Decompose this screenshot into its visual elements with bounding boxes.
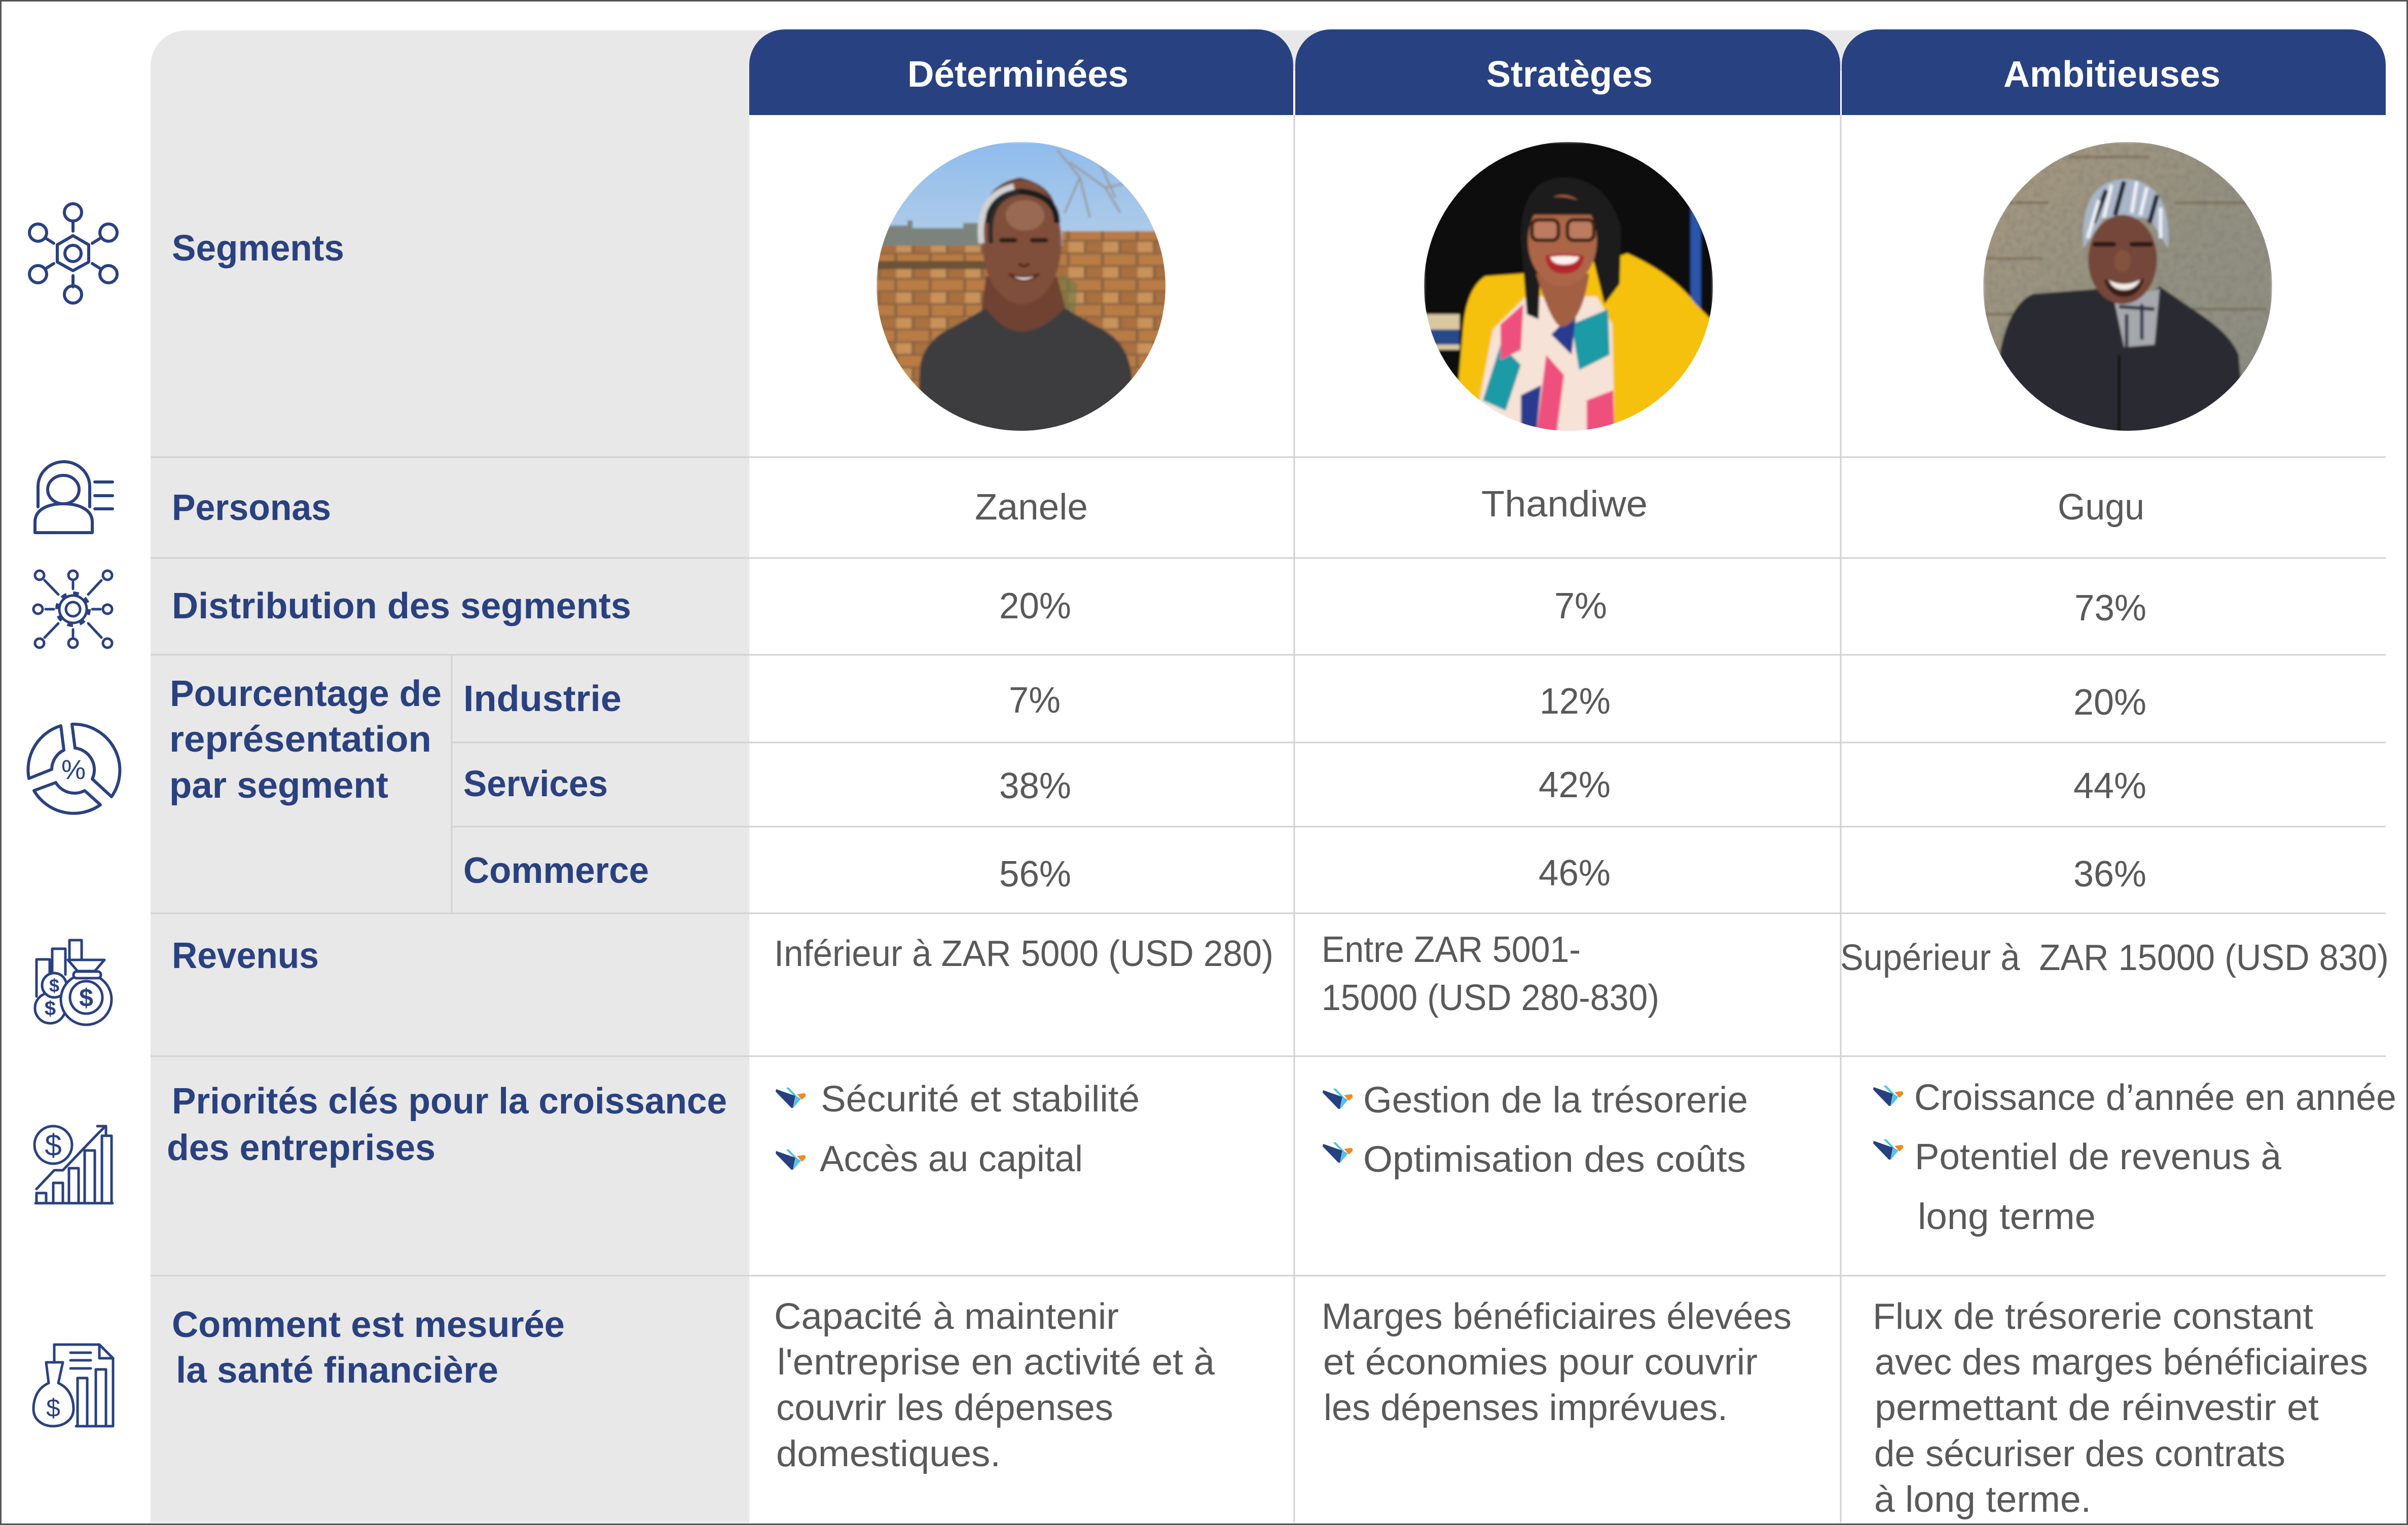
distribution value: 7%: 7% — [1554, 586, 1607, 626]
icon: persona — [35, 462, 113, 533]
persona name: Thandiwe: Thandiwe — [1481, 484, 1648, 525]
photo: Déterminées portrait — [877, 142, 1169, 436]
financial health: Stratèges — [1322, 1296, 1792, 1428]
industrie value: 12%: 12% — [1540, 681, 1611, 722]
financial health: Ambitieuses — [1873, 1296, 2368, 1520]
header: Déterminées: Déterminées — [907, 54, 1128, 95]
icon: revenue coins and bag: $ — [49, 975, 59, 996]
label: Priorités clés pour la croissance des entreprises — [167, 1081, 727, 1168]
label: Industrie: Industrie — [463, 679, 622, 719]
header: Ambitieuses: Ambitieuses — [2003, 54, 2220, 95]
priorities list: Déterminées: Sécurité et stabilité — [821, 1079, 1140, 1120]
industrie value: 20%: 20% — [2073, 682, 2146, 723]
icon: financial document and money bag: $ — [46, 1394, 60, 1422]
icon: revenue coins and bag: $ — [45, 997, 56, 1020]
header: Stratèges — [1295, 29, 1840, 115]
revenue: Ambitieuses: Supérieur à ZAR 15000 (USD 830) — [1840, 938, 2389, 978]
financial health: Ambitieuses: à long terme. — [1874, 1479, 2091, 1520]
services value: 42%: 42% — [1539, 765, 1611, 805]
financial health: Déterminées: domestiques. — [776, 1434, 1001, 1474]
header: Ambitieuses — [1842, 29, 2386, 115]
priorities list: Déterminées: Accès au capital — [820, 1139, 1083, 1179]
label: Revenus: Revenus — [172, 936, 319, 976]
panel: grey label column — [151, 30, 1886, 1523]
commerce value: 36%: 36% — [2073, 854, 2146, 895]
revenue: Déterminées: Inférieur à ZAR 5000 (USD 280) — [774, 934, 1273, 974]
revenue: Stratèges: 15000 (USD 280-830) — [1322, 978, 1659, 1018]
services value: 38%: 38% — [999, 766, 1071, 806]
label: Pourcentage de représentation par segment: Pourcentage de — [170, 674, 442, 714]
label: Commerce: Commerce — [463, 850, 649, 891]
persona name: Gugu: Gugu — [2058, 487, 2144, 528]
commerce value: 46%: 46% — [1539, 853, 1611, 894]
icon: growth chart: $ — [45, 1128, 62, 1162]
icon: percentage pie — [28, 724, 120, 813]
revenue: Stratèges — [1322, 929, 1659, 1018]
financial health: Déterminées: l'entreprise en activité et à — [777, 1342, 1215, 1383]
financial health: Déterminées — [774, 1296, 1215, 1474]
financial health: Déterminées: Capacité à maintenir — [774, 1296, 1119, 1337]
financial health: Ambitieuses: de sécuriser des contrats — [1874, 1434, 2285, 1474]
label: Services: Services — [463, 764, 608, 804]
label: Segments: Segments — [172, 228, 344, 269]
revenue: Stratèges: Entre ZAR 5001- — [1322, 929, 1581, 970]
label: Comment est mesurée la santé financière: la santé financière — [176, 1350, 498, 1391]
header: Déterminées — [749, 29, 1293, 115]
priorities list: Stratèges — [1323, 1080, 1748, 1180]
financial health: Ambitieuses: permettant de réinvestir et — [1875, 1388, 2319, 1428]
priorities list: Ambitieuses — [1873, 1077, 2396, 1237]
icon: financial document and money bag — [33, 1345, 113, 1426]
label: Comment est mesurée la santé financière — [172, 1305, 565, 1391]
label: Priorités clés pour la croissance des entreprises: Priorités clés pour la croissance — [172, 1081, 727, 1122]
financial health: Ambitieuses: avec des marges bénéficiaires — [1875, 1342, 2368, 1383]
icon: growth chart — [34, 1126, 113, 1203]
icon: segments hub — [29, 204, 117, 303]
photo: Ambitieuses portrait — [1983, 142, 2272, 436]
financial health: Déterminées: couvrir les dépenses — [776, 1388, 1113, 1428]
icon: percentage pie: % — [61, 755, 86, 785]
photo: Stratèges portrait — [1424, 142, 1716, 436]
financial health: Stratèges: les dépenses imprévues. — [1324, 1388, 1728, 1428]
label: Pourcentage de représentation par segment: représentation — [169, 719, 431, 760]
icon: revenue coins and bag — [35, 940, 112, 1025]
label: Personas: Personas — [172, 488, 331, 528]
label: Pourcentage de représentation par segment — [169, 674, 442, 806]
icon: distribution gear — [33, 571, 112, 648]
priorities list: Stratèges: Optimisation des coûts — [1363, 1139, 1746, 1180]
label: Pourcentage de représentation par segment: par segment — [169, 765, 388, 806]
financial health: Stratèges: et économies pour couvrir — [1323, 1342, 1758, 1383]
distribution value: 73%: 73% — [2074, 588, 2146, 628]
priorities list: Ambitieuses: long terme — [1918, 1197, 2096, 1237]
priorities list: Déterminées — [776, 1079, 1140, 1179]
label: Comment est mesurée la santé financière: Comment est mesurée — [172, 1305, 565, 1345]
icon: revenue coins and bag: $ — [79, 984, 93, 1012]
services value: 44%: 44% — [2073, 766, 2146, 806]
commerce value: 56%: 56% — [999, 854, 1071, 895]
financial health: Ambitieuses: Flux de trésorerie constant — [1873, 1296, 2313, 1337]
priorities list: Ambitieuses: Potentiel de revenus à — [1915, 1137, 2282, 1177]
distribution value: 20%: 20% — [999, 586, 1071, 626]
header: Stratèges: Stratèges — [1486, 54, 1653, 95]
priorities list: Stratèges: Gestion de la trésorerie — [1363, 1080, 1748, 1121]
financial health: Stratèges: Marges bénéficiaires élevées — [1322, 1296, 1792, 1337]
label: Distribution des segments: Distribution des segments — [172, 586, 631, 626]
persona name: Zanele: Zanele — [975, 487, 1088, 528]
industrie value: 7%: 7% — [1009, 680, 1061, 721]
priorities list: Ambitieuses: Croissance d’année en année — [1914, 1077, 2396, 1118]
label: Priorités clés pour la croissance des entreprises: des entreprises — [167, 1128, 435, 1168]
